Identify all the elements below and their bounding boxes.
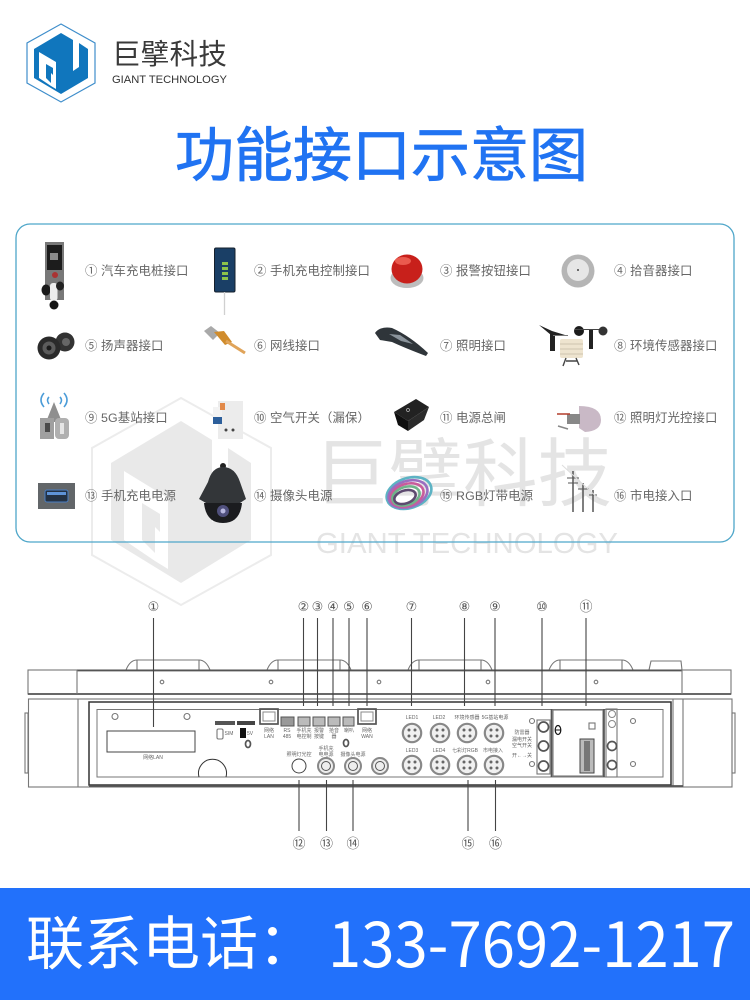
item 13: usb xyxy=(38,483,176,509)
item 8: weather sensor xyxy=(539,325,717,366)
callout numbers: ⑭ xyxy=(346,837,360,852)
icon: red button xyxy=(390,254,424,288)
item 3: alarm button xyxy=(390,254,531,288)
icon: street lamp xyxy=(375,328,428,356)
icon: phone xyxy=(214,248,235,315)
ports row: 电控制 xyxy=(296,733,312,740)
ports row: WAN xyxy=(361,734,373,740)
watermark: 巨擘科技 xyxy=(314,415,612,522)
breaker section: 开←→关 xyxy=(512,752,532,759)
left section: LCD and slots: SIM xyxy=(225,731,233,737)
label: ② 手机充电控制接口 xyxy=(254,263,370,278)
item 9: 5G xyxy=(40,393,168,439)
callout numbers: ⑤ xyxy=(343,600,355,615)
logo name: 巨擘科技 xyxy=(112,32,227,73)
label: ① 汽车充电桩接口 xyxy=(85,263,188,278)
callout numbers: ⑥ xyxy=(361,600,373,615)
label: ⑦ 照明接口 xyxy=(440,338,506,353)
icon: utility poles xyxy=(562,465,600,512)
phone number: 133-7692-1217 xyxy=(328,895,735,985)
phone label: 联系电话： xyxy=(26,897,316,981)
logo english: GIANT TECHNOLOGY xyxy=(112,74,227,86)
label: ④ 拾音器接口 xyxy=(614,263,692,278)
item 7: street lamp xyxy=(375,328,506,356)
callout numbers: ⑧ xyxy=(459,600,470,615)
contact bar xyxy=(0,888,750,1000)
ports row: 器 xyxy=(331,734,337,740)
icon: LED strip coil xyxy=(382,472,436,514)
label: ⑬ 手机充电电源 xyxy=(85,488,176,503)
icon: microphone pickup xyxy=(562,254,594,288)
item 16: mains xyxy=(562,465,692,512)
callout numbers: ⑦ xyxy=(406,600,417,615)
ports row: RS xyxy=(284,728,291,734)
icon: speakers xyxy=(38,332,74,360)
icon: charging pile xyxy=(42,242,64,310)
lower connectors: 摄像头电源 xyxy=(340,751,366,758)
item 11: power switch xyxy=(394,399,506,431)
label: ⑧ 环境传感器接口 xyxy=(614,338,717,353)
ports row: 按键 xyxy=(314,733,324,740)
label: ⑥ 网线接口 xyxy=(254,338,320,353)
item 14: camera xyxy=(199,463,332,523)
callout numbers: ① xyxy=(148,600,159,615)
housing: lower body xyxy=(25,699,735,787)
lower connectors: 手机充 xyxy=(318,745,334,752)
lower connectors xyxy=(286,745,388,774)
lower connectors: 照明灯光控 xyxy=(286,751,312,758)
left section: LCD and slots: 网络LAN xyxy=(143,754,163,761)
label: ⑤ 扬声器接口 xyxy=(85,338,164,353)
callout numbers: ⑮ xyxy=(461,837,475,852)
LED connectors xyxy=(403,714,508,774)
callout numbers: ② xyxy=(298,600,309,615)
callout numbers: ④ xyxy=(327,600,339,615)
LED connectors: LED4 xyxy=(433,748,445,754)
item 2: phone xyxy=(214,248,370,315)
item 15: RGB strip xyxy=(382,472,533,514)
label: ⑩ 空气开关（漏保） xyxy=(254,410,370,425)
item 1: car charger xyxy=(42,242,188,310)
label: ⑮ RGB灯带电源 xyxy=(440,489,533,503)
ports row: 喇叭 xyxy=(344,727,354,734)
icon: usb port xyxy=(38,483,75,509)
breaker section xyxy=(512,709,561,777)
callout numbers: ⑨ xyxy=(489,600,501,615)
LED connectors: LED1 xyxy=(406,715,418,721)
label: ⑨ 5G基站接口 xyxy=(85,410,168,425)
icon: dome camera xyxy=(199,463,246,523)
icon: ethernet cable xyxy=(204,326,245,353)
label: ⑫ 照明灯光控接口 xyxy=(614,410,717,425)
watermark: GIANT TECHNOLOGY xyxy=(316,528,618,560)
callout numbers: ⑯ xyxy=(489,837,502,852)
left section: LCD and slots xyxy=(107,714,348,777)
logo mark xyxy=(27,24,95,102)
callout numbers: ⑬ xyxy=(320,837,333,852)
LED connectors: 市电接入 xyxy=(483,747,503,754)
ports row: LAN xyxy=(264,734,274,740)
callout numbers: ③ xyxy=(312,600,323,615)
ports row: 网络 xyxy=(362,727,372,734)
icon: air switch xyxy=(213,401,243,439)
leader lines xyxy=(154,618,586,831)
label: ③ 报警按钮接口 xyxy=(440,263,531,278)
callout numbers: ⑩ xyxy=(536,600,548,615)
callout numbers: ⑫ xyxy=(292,837,306,852)
label: ⑭ 摄像头电源 xyxy=(254,488,332,503)
watermark xyxy=(92,398,618,605)
icon: photocell xyxy=(557,406,601,432)
main switch section xyxy=(553,709,636,777)
callout numbers: ⑪ xyxy=(579,600,593,615)
ports row: 报警 xyxy=(314,727,324,734)
icon: 5G tower xyxy=(40,393,69,439)
label: ⑪ 电源总闸 xyxy=(440,411,506,425)
LED connectors: 七彩灯RGB xyxy=(452,747,479,754)
ports row xyxy=(260,709,376,740)
breaker section: 漏电开关 xyxy=(512,736,532,743)
LED connectors: 5G基站电源 xyxy=(482,714,508,721)
callout numbers xyxy=(148,600,593,852)
ports row: 网络 xyxy=(264,727,274,734)
item 6: network cable xyxy=(204,326,320,353)
item 12: light control xyxy=(557,406,717,432)
housing: top bar xyxy=(28,660,731,694)
breaker section: 空气开关 xyxy=(512,742,532,749)
ports row: 手机充 xyxy=(296,727,312,734)
LED connectors: LED2 xyxy=(433,715,445,721)
item 5: speaker xyxy=(38,332,164,360)
ports row: 拾音 xyxy=(329,727,339,734)
lower connectors: 电电源 xyxy=(318,751,334,758)
item 4: pickup xyxy=(562,254,692,288)
title: 功能接口示意图 xyxy=(175,108,588,193)
ports row: 485 xyxy=(283,734,291,740)
diagram: interface panel drawing xyxy=(25,600,735,852)
LED connectors: 环境传感器 xyxy=(454,714,480,721)
panel: interface list xyxy=(16,224,734,542)
logo xyxy=(27,24,227,102)
icon: rocker switch xyxy=(394,399,429,431)
LED connectors: LED3 xyxy=(406,748,418,754)
icon: environment sensor xyxy=(539,325,608,366)
item 10: breaker xyxy=(213,401,370,439)
left section: LCD and slots: 5V xyxy=(247,731,254,737)
label: ⑯ 市电接入口 xyxy=(614,488,692,503)
breaker section: 防雷器 xyxy=(514,729,530,736)
